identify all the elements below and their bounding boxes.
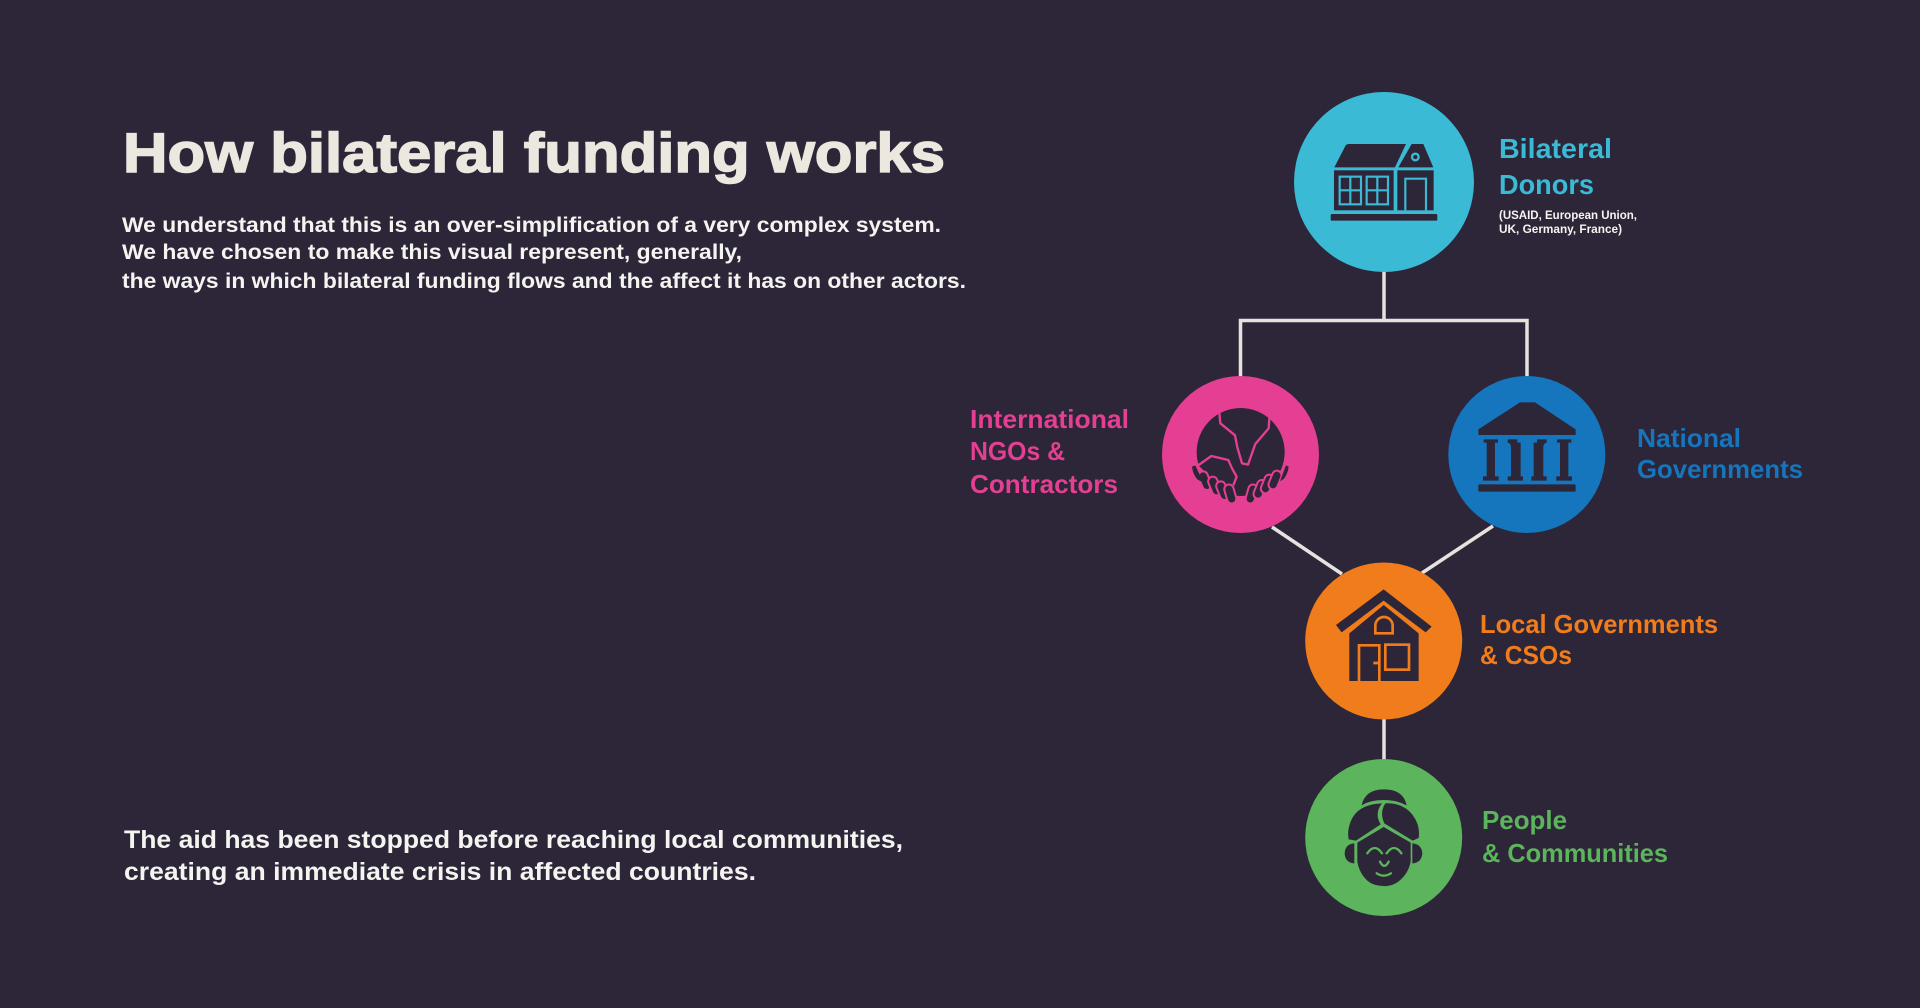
icon: small house [1336, 589, 1432, 681]
closing statement: creating an immediate crisis in affected countries. [124, 858, 756, 886]
node: people and communities [1305, 759, 1462, 916]
label: bilateral donors [1499, 133, 1612, 200]
label: donor examples [1499, 208, 1637, 236]
label: national governments: National [1637, 423, 1741, 453]
label: bilateral donors: Donors [1499, 169, 1594, 200]
label: international NGOs: NGOs & [970, 436, 1065, 466]
node: local governments [1305, 562, 1462, 720]
intro paragraph: We understand that this is an over-simplification of a very complex system. [122, 213, 941, 237]
label: local governments: Local Governments [1480, 609, 1718, 639]
label: bilateral donors: Bilateral [1499, 133, 1612, 164]
intro paragraph [122, 213, 966, 293]
title: How bilateral funding works [123, 121, 945, 184]
label: donor examples: (USAID, European Union, [1499, 208, 1637, 222]
connector lines [1240, 270, 1527, 761]
label: international NGOs: International [970, 404, 1129, 434]
label: national governments: Governments [1637, 454, 1803, 484]
node: bilateral donors [1294, 92, 1474, 272]
label: international NGOs: Contractors [970, 469, 1118, 499]
label: local governments: & CSOs [1480, 640, 1572, 670]
node: national governments [1448, 376, 1605, 533]
label: people and communities [1482, 805, 1668, 868]
closing statement [124, 826, 903, 886]
label: international NGOs [970, 404, 1129, 499]
label: people and communities: People [1482, 805, 1567, 835]
node: international NGOs [1162, 376, 1319, 533]
intro paragraph: We have chosen to make this visual represent, generally, [122, 240, 742, 264]
label: national governments [1637, 423, 1803, 484]
label: local governments [1480, 609, 1718, 670]
closing statement: The aid has been stopped before reaching local communities, [124, 826, 903, 854]
intro paragraph: the ways in which bilateral funding flows and the affect it has on other actors. [122, 269, 966, 293]
icon: hands holding globe [1192, 408, 1289, 505]
label: donor examples: UK, Germany, France) [1499, 222, 1622, 236]
icon: smiling person [1345, 789, 1422, 886]
icon: government building [1478, 402, 1576, 492]
label: people and communities: & Communities [1482, 838, 1668, 868]
icon: large house [1331, 144, 1437, 221]
